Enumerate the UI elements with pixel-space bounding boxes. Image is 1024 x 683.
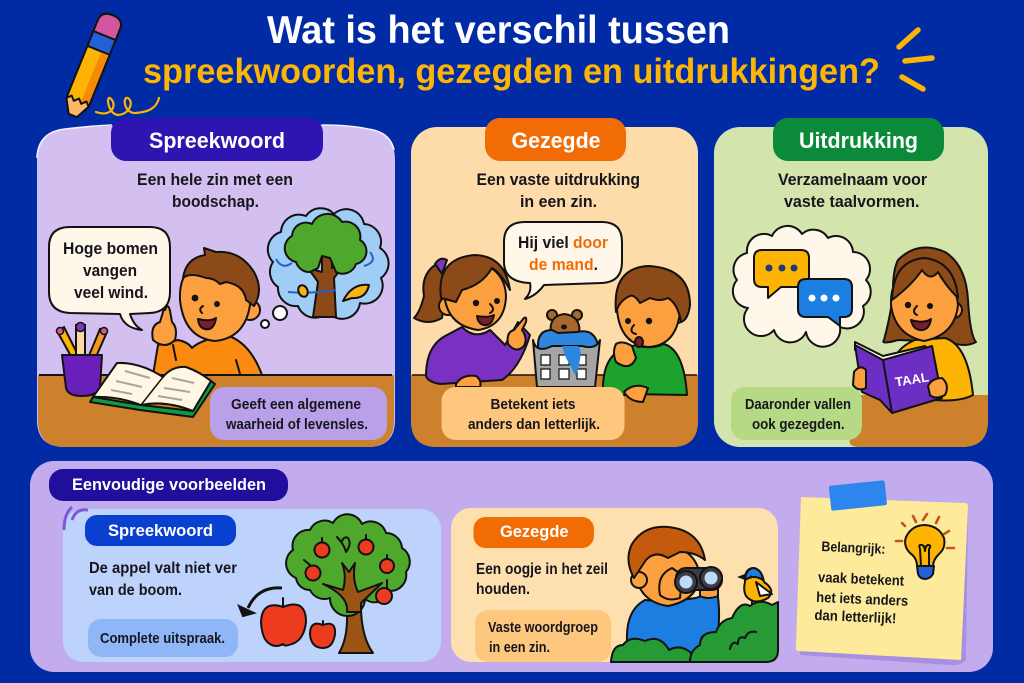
caption: in een zin.	[489, 640, 550, 656]
heading pill	[773, 118, 944, 161]
apple tree	[286, 514, 410, 653]
speech bubble: veel wind.	[74, 283, 148, 302]
heading pill: Gezegde	[512, 128, 600, 153]
caption	[210, 387, 387, 440]
panel: spreekwoord	[37, 118, 395, 447]
boy pointing	[152, 248, 262, 375]
speech bubble: de mand.	[529, 255, 598, 274]
caption	[475, 610, 611, 662]
speech bubble: Hoge bomen	[63, 239, 158, 258]
section heading	[49, 469, 288, 501]
definition text: Verzamelnaam voor	[778, 171, 928, 189]
note text: vaak betekent	[818, 570, 905, 590]
label pill	[85, 515, 236, 546]
laundry basket with bear	[533, 310, 600, 387]
definition text: boodschap.	[172, 193, 259, 211]
thought cloud with chat icons	[733, 226, 871, 347]
definition text: in een zin.	[520, 193, 597, 211]
note text: het iets anders	[816, 590, 908, 610]
title: Wat is het verschil tussen	[267, 9, 730, 52]
boy with binoculars	[627, 527, 722, 662]
section heading: Eenvoudige voorbeelden	[72, 475, 266, 494]
note text: Belangrijk:	[821, 538, 886, 557]
girl reading	[853, 248, 976, 413]
panel: uitdrukking	[714, 118, 988, 447]
heading pill	[111, 118, 323, 161]
speech bubble: Hij viel door	[518, 233, 608, 252]
yellow chat bubble	[754, 250, 809, 298]
thought cloud with tree	[268, 208, 389, 319]
panel: eenvoudige voorbeelden	[30, 461, 993, 672]
sticky note	[796, 480, 968, 665]
example text: Een oogje in het zeil	[476, 561, 608, 578]
caption	[88, 619, 238, 657]
caption: anders dan letterlijk.	[468, 417, 600, 433]
example text	[476, 561, 608, 598]
small apple	[310, 621, 335, 648]
caption: Complete uitspraak.	[100, 631, 225, 647]
title: spreekwoorden, gezegden en uitdrukkingen?	[143, 52, 880, 91]
example text: van de boom.	[89, 582, 182, 599]
definition text	[137, 171, 293, 211]
example text: De appel valt niet ver	[89, 560, 237, 577]
speech bubble: vangen	[83, 261, 137, 280]
speech bubble	[49, 227, 170, 330]
definition text	[778, 171, 928, 211]
note text	[814, 538, 911, 628]
definition text: Een hele zin met een	[137, 171, 293, 189]
bushes	[611, 602, 778, 662]
caption: Geeft een algemene	[231, 397, 361, 413]
caption	[731, 387, 862, 440]
example: gezegde	[451, 508, 778, 662]
heading pill: Uitdrukking	[799, 128, 918, 153]
blue chat bubble	[798, 279, 852, 326]
caption: ook gezegden.	[752, 417, 845, 433]
caption	[442, 387, 624, 440]
table	[850, 395, 988, 447]
caption: Daaronder vallen	[745, 397, 851, 413]
note text: dan letterlijk!	[814, 608, 897, 627]
thought bubbles	[261, 306, 287, 328]
caption: Betekent iets	[490, 397, 576, 413]
girl reading: TAAL	[894, 369, 930, 390]
label pill: Gezegde	[500, 522, 568, 541]
definition text: Een vaste uitdrukking	[476, 171, 640, 189]
table	[38, 375, 394, 447]
definition text	[476, 171, 640, 211]
example text	[89, 560, 237, 599]
label pill	[474, 517, 594, 548]
heading pill	[485, 118, 626, 161]
caption: Vaste woordgroep	[488, 620, 598, 636]
icon: sparkle lines	[899, 30, 932, 89]
icon: light bulb	[896, 514, 954, 579]
big apple	[261, 598, 306, 646]
speech bubble	[504, 222, 622, 299]
panel: gezegde	[411, 118, 698, 447]
decorative squiggle	[64, 507, 88, 530]
caption: waarheid of levensles.	[225, 417, 368, 433]
label pill: Spreekwoord	[108, 521, 213, 540]
title	[143, 9, 880, 91]
table	[411, 375, 698, 447]
boy thinking	[603, 266, 690, 402]
heading pill: Spreekwoord	[149, 128, 285, 153]
tape	[829, 480, 887, 511]
curved arrow	[239, 588, 282, 616]
bird	[737, 568, 772, 607]
example: spreekwoord	[63, 507, 441, 662]
icon: pencil	[61, 11, 159, 120]
pencil cup	[56, 322, 108, 396]
open book	[90, 363, 215, 417]
girl	[414, 255, 530, 387]
definition text: vaste taalvormen.	[784, 193, 920, 211]
example text: houden.	[476, 581, 530, 598]
